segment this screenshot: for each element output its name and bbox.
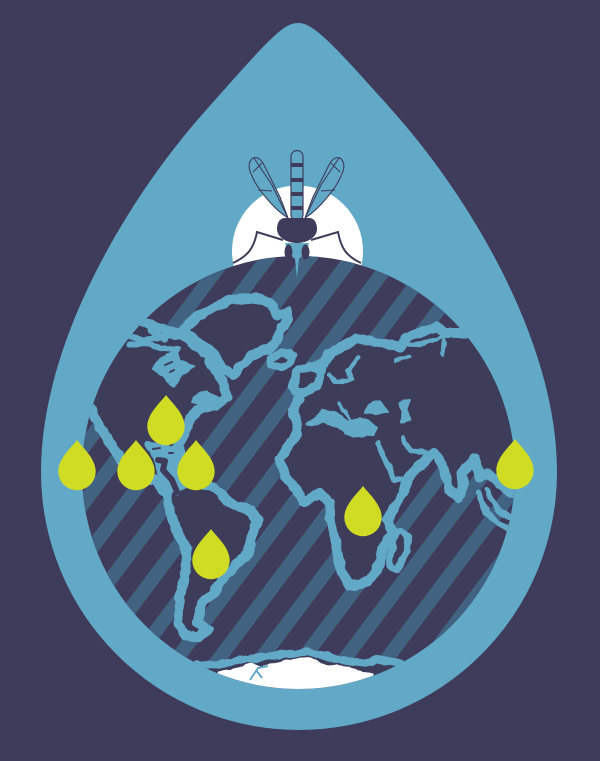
continents [89,292,514,689]
Greenland [182,298,288,375]
Iceland [270,353,293,368]
South America [167,482,258,637]
British Isles [294,366,322,392]
mosquito thorax [277,218,317,243]
Black Sea [365,402,388,414]
mosquito [233,150,361,278]
ocean stripes [83,256,514,674]
large blue water drop [41,23,557,730]
mosquito left wing [249,158,288,218]
mosquito left eye [284,244,292,260]
mosquito right eye [302,244,310,260]
Persian Gulf [403,438,427,453]
marker: Mexico [117,440,155,490]
Arctic islands [125,330,205,355]
Antarctic coast [194,647,404,689]
Hudson Bay islands [165,362,174,372]
mosquito right wing [305,158,344,218]
marker: Africa [344,486,382,536]
Madagascar [390,530,408,569]
Adriatic [338,403,352,423]
land pockets in the seas [153,362,177,492]
mosquito face and proboscis [285,243,309,278]
marker: South America [192,529,230,579]
Caspian Sea [399,400,410,422]
Gulf of Mexico [145,443,186,495]
North America [89,318,232,496]
inland seas [145,350,410,495]
Hudson Bay [153,350,193,387]
marker: Asia [496,439,534,489]
Siberian coast [395,335,445,360]
Red Sea and Gulf of Aden [378,443,408,480]
Mediterranean [307,410,378,437]
marker: United States [147,395,185,445]
globe ocean [80,250,520,695]
Antarctica details [250,666,268,680]
mosquito abdomen [291,150,303,220]
marker: Caribbean [177,440,215,490]
coast details [125,330,510,530]
white sun behind mosquito [232,186,363,316]
marker: Pacific [58,440,96,490]
Baltic [330,358,358,382]
Caribbean islands [153,445,173,453]
globe [82,256,514,689]
Central America land [158,460,177,492]
yellow drop markers [58,395,534,579]
Antarctica ice [217,657,374,689]
Indochina islands [478,490,510,530]
Afro-Eurasia [274,321,514,592]
Great Lakes [193,392,220,405]
mosquito legs [233,232,361,263]
